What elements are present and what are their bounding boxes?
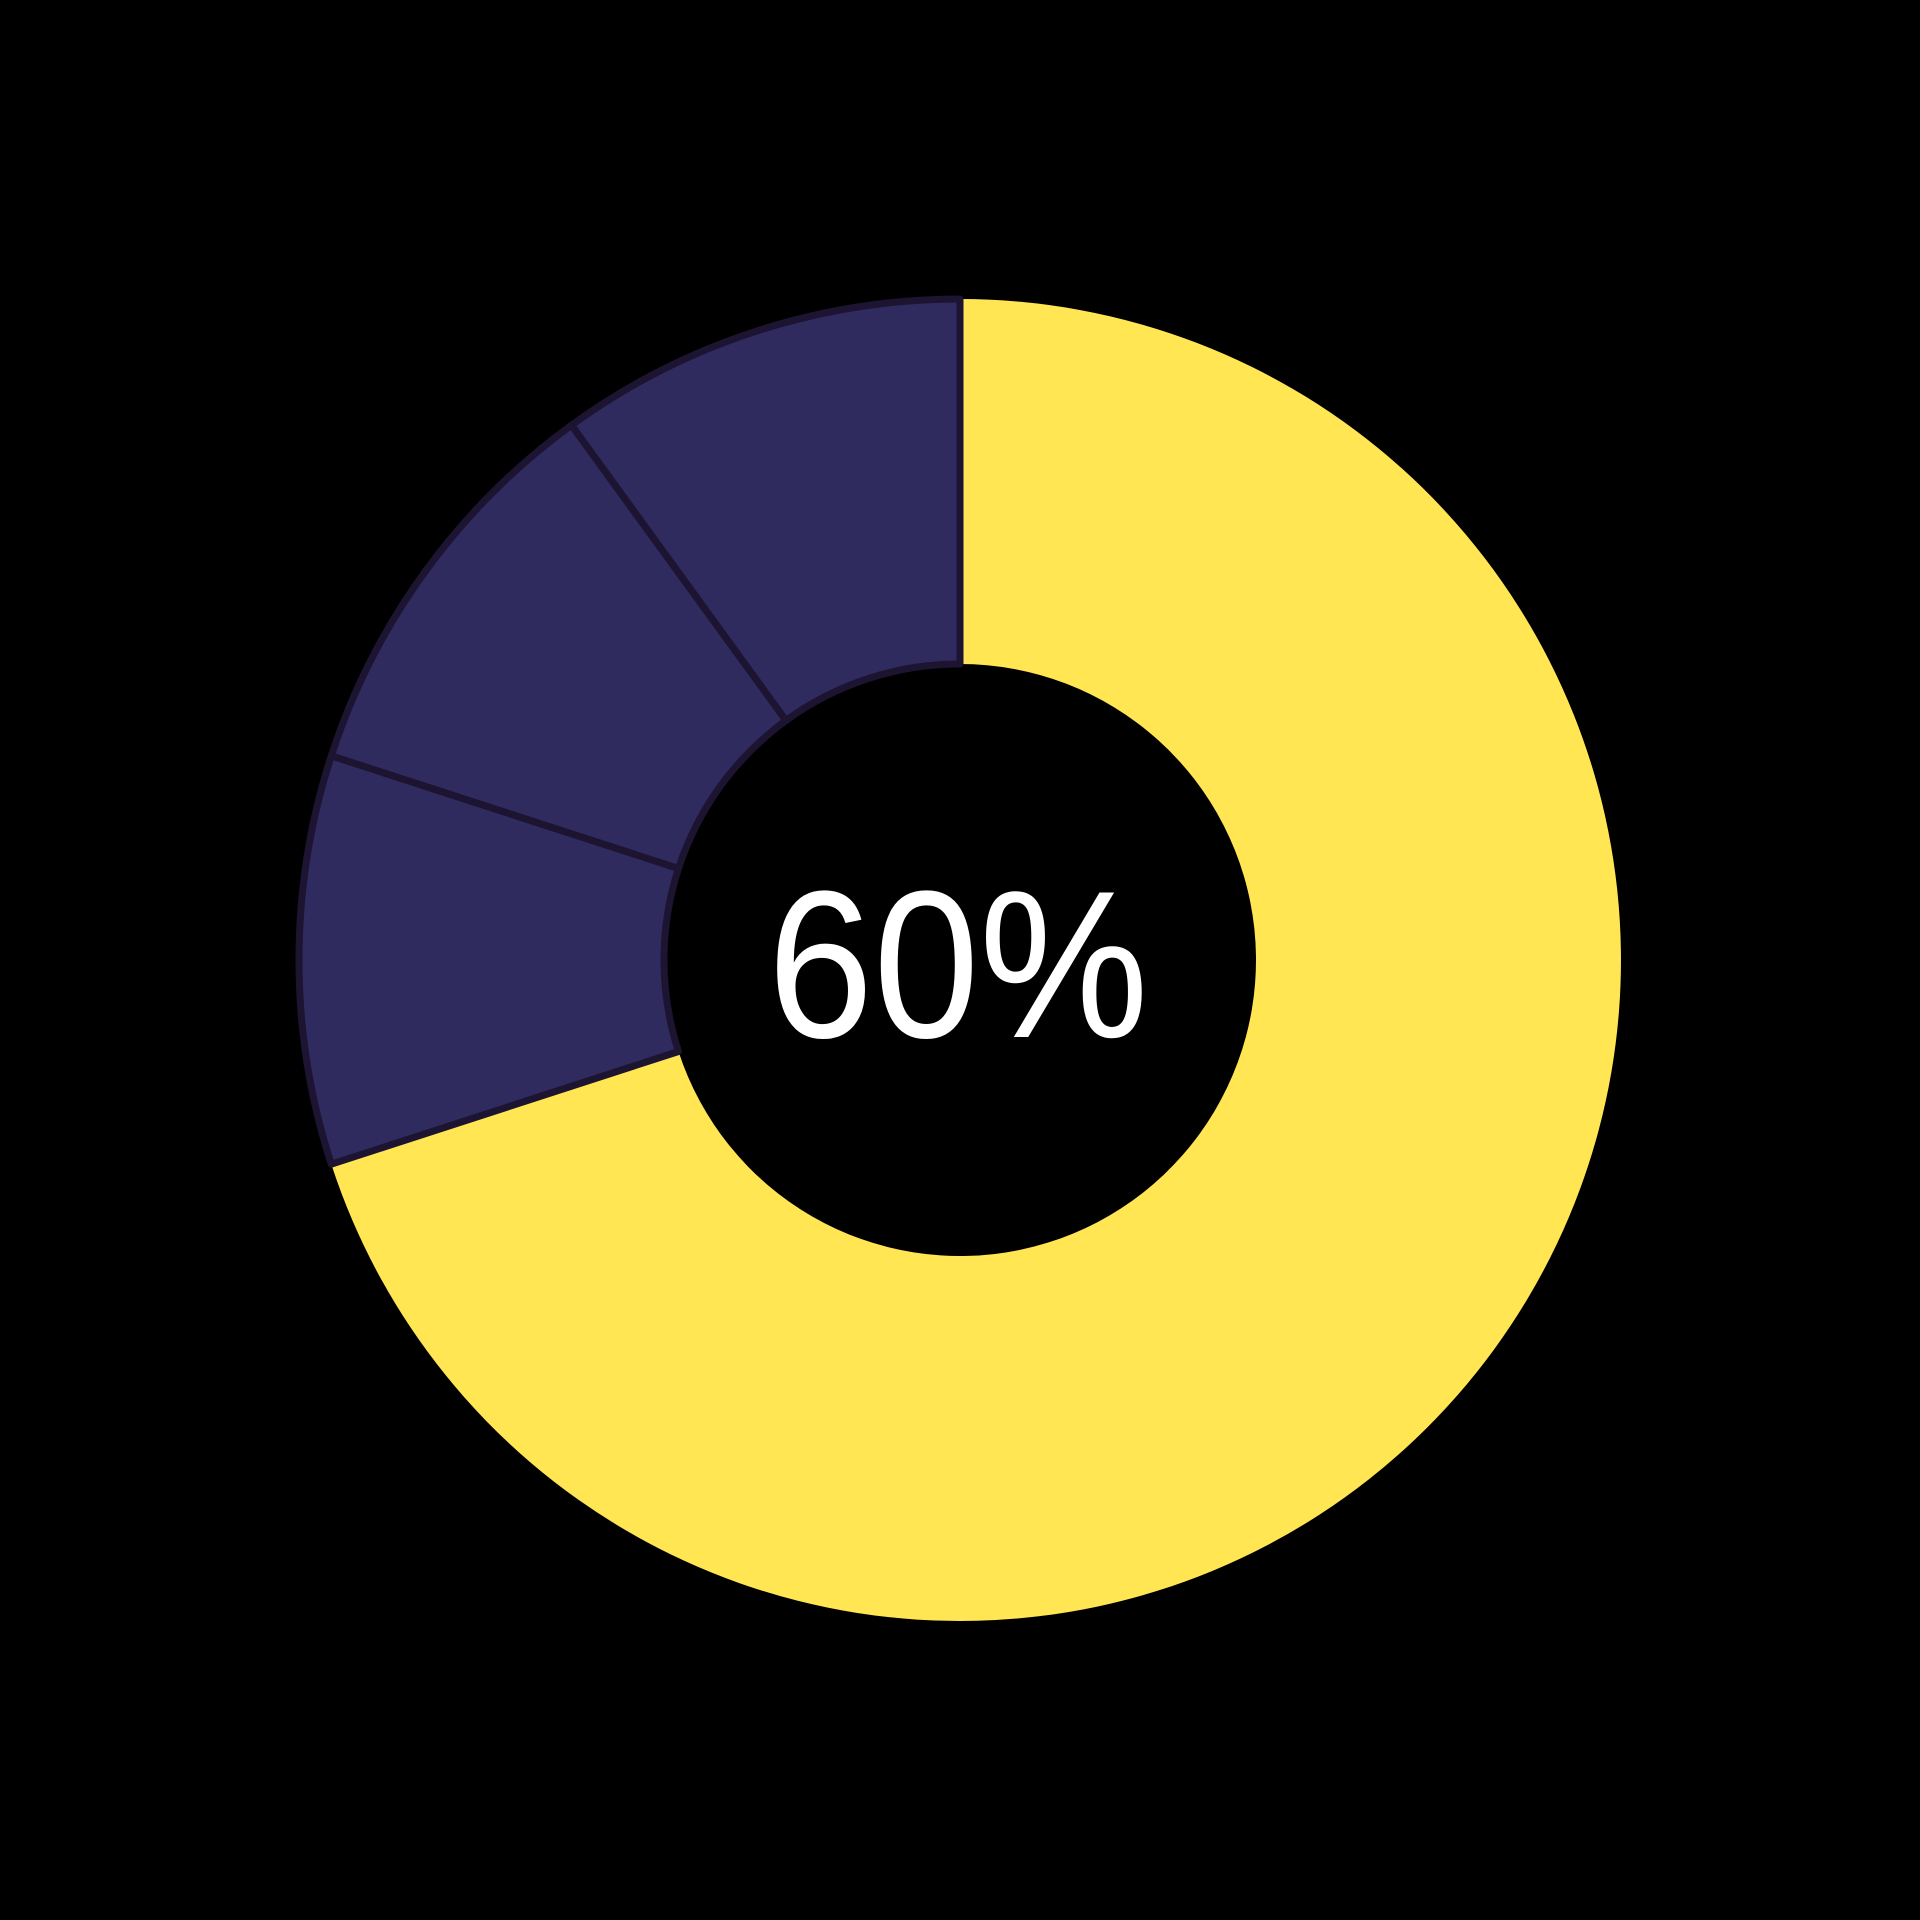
segment: yellow 70% (331, 299, 1621, 1621)
segment: purple 2 (331, 425, 786, 868)
center label: 60%: 60% (768, 847, 1148, 1082)
segment: purple 3 (572, 299, 960, 720)
donut chart (299, 299, 1621, 1621)
segment: purple 1 (299, 756, 678, 1164)
